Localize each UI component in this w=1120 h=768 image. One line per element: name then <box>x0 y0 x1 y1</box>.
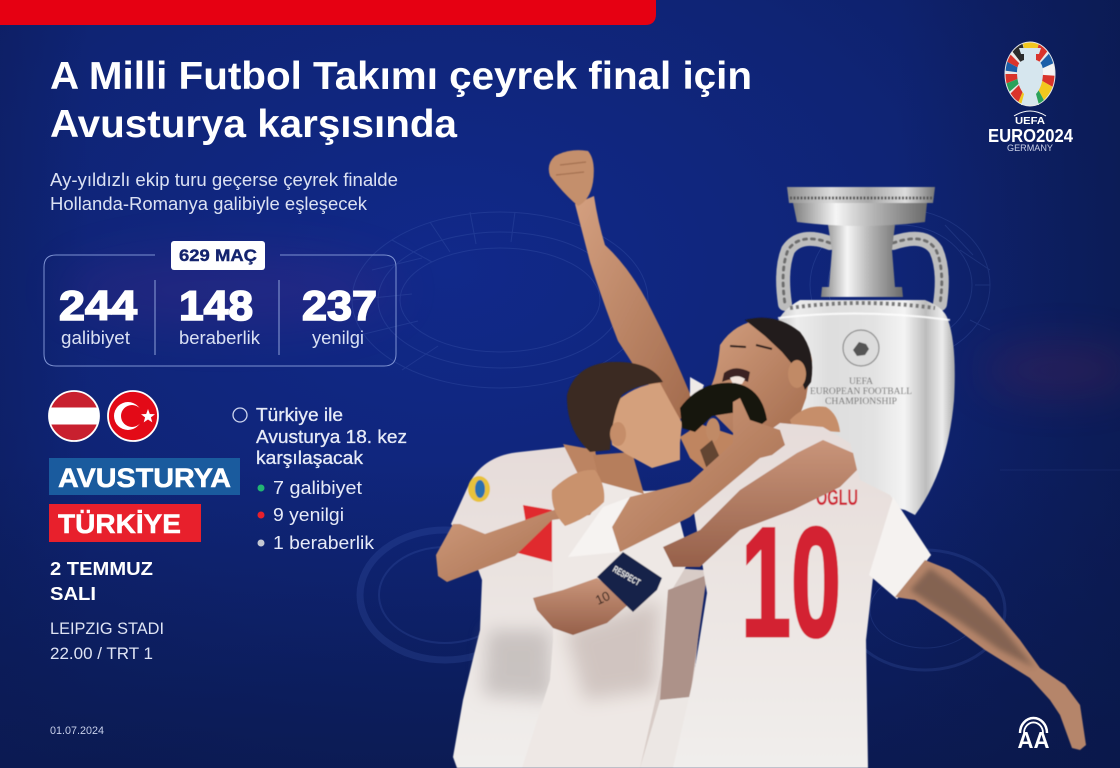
publication date: 01.07.2024 <box>50 725 104 737</box>
trophy engraving: CHAMPIONSHIP <box>825 397 897 407</box>
team label: Austria: AVUSTURYA <box>58 463 231 493</box>
match date <box>50 559 153 604</box>
stat: draws: 148 <box>179 282 253 329</box>
total matches badge <box>171 241 265 270</box>
head-to-head heading: Türkiye ile <box>256 405 343 425</box>
stat: losses <box>302 282 377 348</box>
third shirt behind number 10 <box>640 575 707 768</box>
head-to-head heading: karşılaşacak <box>256 448 364 468</box>
tournament patch <box>468 476 490 502</box>
head-to-head heading: Avusturya 18. kez <box>256 427 407 447</box>
rear hand on shoulder <box>790 407 840 434</box>
venue and broadcast <box>50 619 164 663</box>
rear player head <box>700 318 812 440</box>
stadium line art <box>352 209 1120 470</box>
trophy emblem <box>843 330 879 366</box>
subtitle: Ay-yıldızlı ekip turu geçerse çeyrek finalde <box>50 170 398 190</box>
arm embracing number 10 <box>663 440 857 567</box>
cup rim <box>787 187 935 226</box>
stat: wins: galibiyet <box>61 328 130 348</box>
centre player head <box>567 362 682 468</box>
tattooed arm <box>895 560 1086 750</box>
white sleeve <box>568 497 630 557</box>
logo wordmark: EURO2024 <box>988 126 1073 146</box>
bowed player head <box>680 383 767 473</box>
draws row: 1 beraberlik <box>273 533 375 553</box>
shirts backing layer <box>522 560 705 768</box>
total matches badge: 629 MAÇ <box>179 246 257 265</box>
icon: Austria flag <box>48 390 100 442</box>
cup body <box>775 300 955 515</box>
stat: draws <box>179 282 261 348</box>
match date: 2 TEMMUZ <box>50 559 153 579</box>
raised arm and fist <box>549 150 691 420</box>
left player jersey <box>451 447 596 768</box>
stat: losses: yenilgi <box>312 328 364 348</box>
title: A Milli Futbol Takımı çeyrek final için <box>50 55 752 98</box>
losses row: 9 yenilgi <box>273 505 344 525</box>
trophy engraving: UEFA <box>849 377 873 387</box>
trophy <box>775 187 955 515</box>
shirt number: 10 <box>741 496 841 670</box>
icon: ring bullet <box>233 408 247 422</box>
stat: wins: 244 <box>59 282 138 329</box>
neck and foot of cup <box>821 225 903 297</box>
shirt name: OGLU <box>816 485 858 510</box>
team label: Turkey: TÜRKİYE <box>58 509 181 539</box>
white sleeve of raised arm <box>690 377 704 400</box>
logo emblem <box>1004 42 1056 106</box>
logo wordmark <box>988 111 1073 153</box>
lower arm and hand: 10 <box>593 588 612 608</box>
trophy engraving <box>810 377 912 407</box>
logo wordmark: UEFA <box>1015 116 1045 127</box>
head-to-head block <box>233 405 407 553</box>
lower arm and hand <box>533 578 630 635</box>
title <box>50 55 752 146</box>
stat: losses: 237 <box>302 282 377 329</box>
players photo <box>436 150 1086 768</box>
wins row: 7 galibiyet <box>273 478 362 498</box>
venue and broadcast: 22.00 / TRT 1 <box>50 644 153 663</box>
number 10 jersey <box>673 423 931 768</box>
arm across centre <box>612 398 785 552</box>
team label: Austria <box>49 458 240 495</box>
handles <box>783 239 942 304</box>
match date: SALI <box>50 584 96 604</box>
centre player neck <box>593 452 644 494</box>
stadium ring bottom <box>360 530 1005 670</box>
red top bar <box>0 0 656 25</box>
left player forearm and hand <box>436 470 604 582</box>
panel: match record <box>44 241 396 366</box>
left player neck <box>563 444 600 478</box>
subtitle: Hollanda-Romanya galibiyle eşleşecek <box>50 194 368 214</box>
centre player jersey <box>522 478 690 768</box>
team label: Turkey <box>49 504 201 542</box>
venue and broadcast: LEIPZIG STADI <box>50 619 164 638</box>
UEFA Euro 2024 logo <box>988 40 1073 153</box>
logo wordmark: GERMANY <box>1007 143 1053 153</box>
Anadolu Agency logo: AA <box>1018 727 1050 753</box>
title: Avusturya karşısında <box>50 103 457 146</box>
stat: wins <box>59 282 138 348</box>
stat: draws: beraberlik <box>179 328 261 348</box>
captain armband: RESPECT <box>610 564 642 589</box>
captain armband <box>597 552 662 612</box>
head-to-head heading <box>256 405 407 468</box>
trophy engraving: EUROPEAN FOOTBALL <box>810 387 912 397</box>
subtitle <box>50 170 398 214</box>
icon: Turkey flag <box>108 391 158 441</box>
